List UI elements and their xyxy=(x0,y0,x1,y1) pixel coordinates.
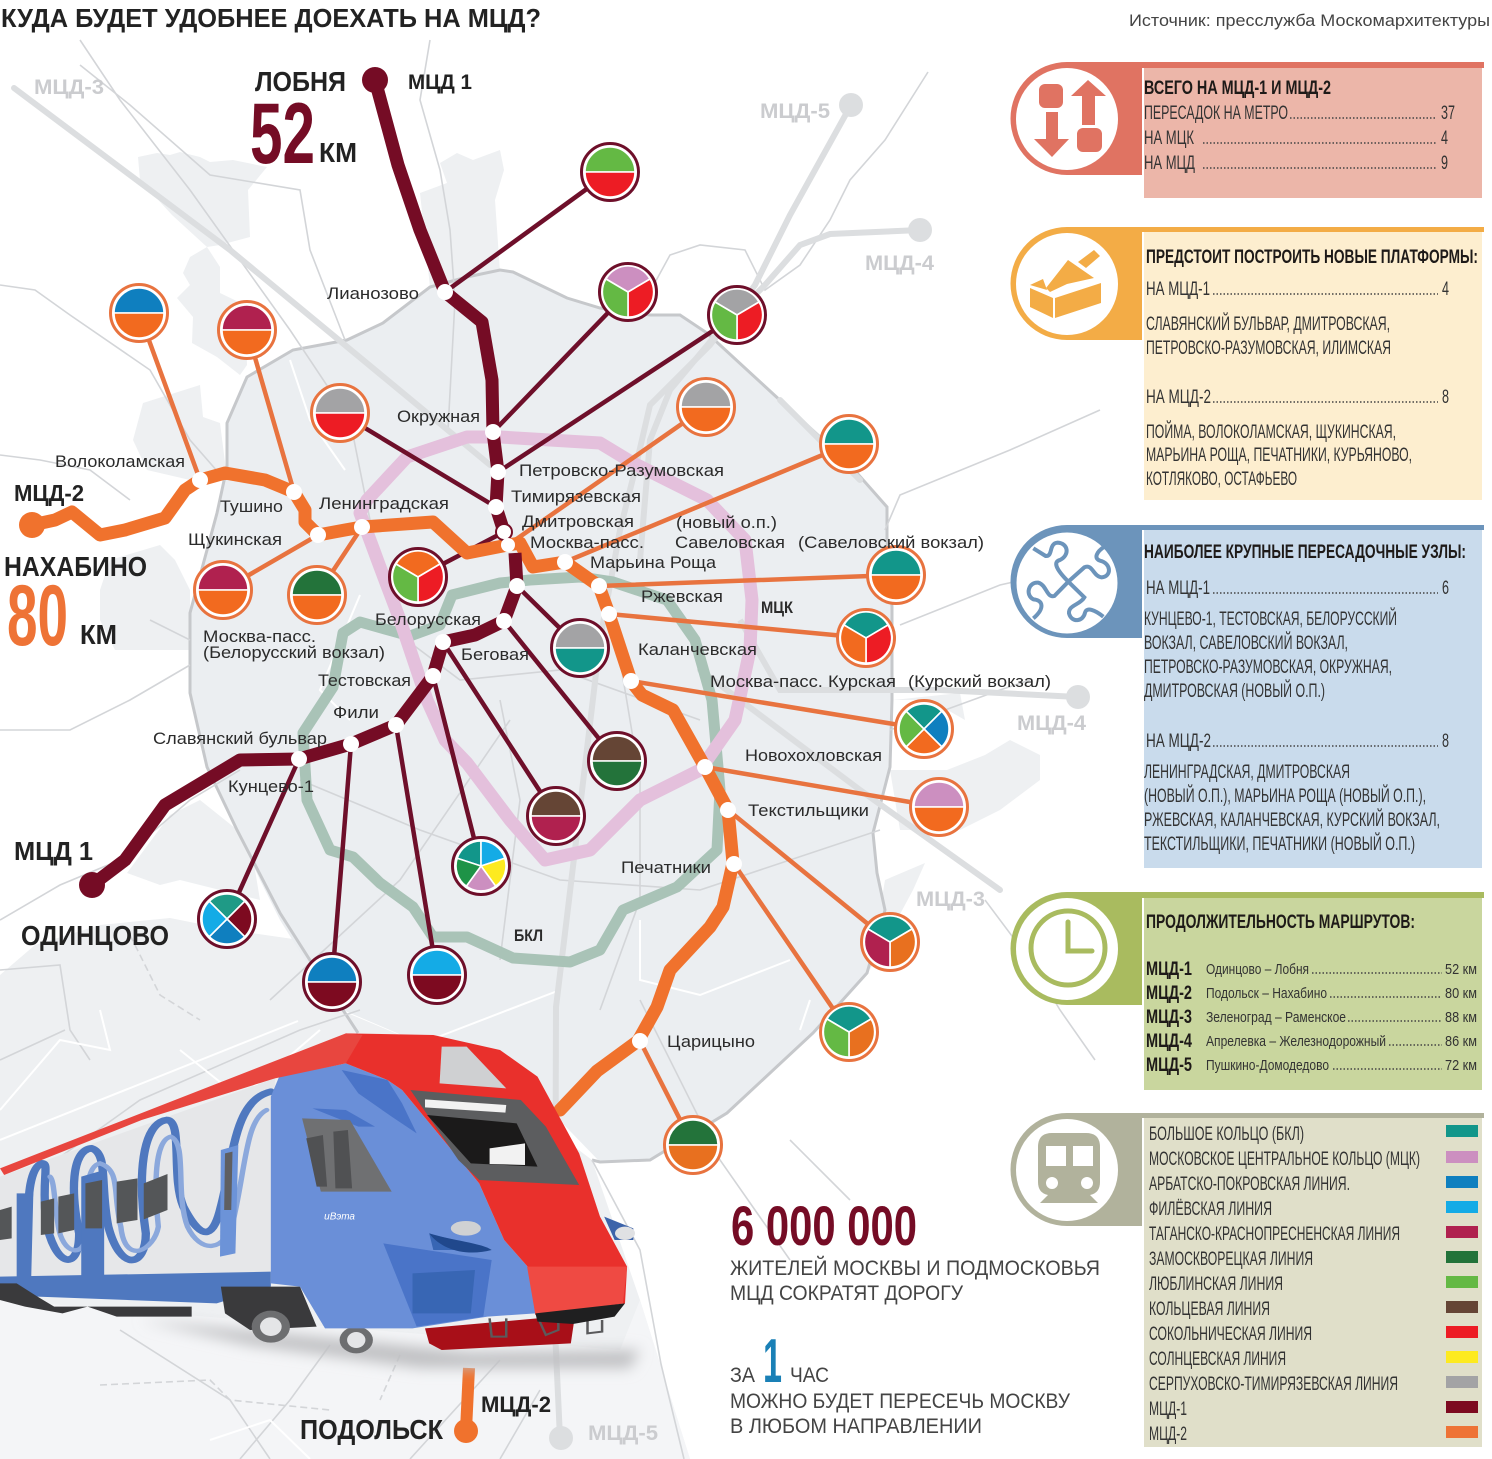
panel: new platforms xyxy=(1011,227,1484,500)
transfer: Fili xyxy=(408,946,466,1004)
callout: 6 million residents: МЦД СОКРАТЯТ ДОРОГУ xyxy=(730,1282,964,1305)
duration rows: МЦД-3 xyxy=(1146,1007,1192,1028)
callout: 6 million residents: 6 000 000 xyxy=(731,1194,917,1257)
station labels: Марьина Роща xyxy=(590,553,717,572)
map background: Moscow and suburbs xyxy=(0,150,1040,1459)
duration rows: 88 км xyxy=(1445,1009,1477,1026)
legend rows: МЦД-1 xyxy=(1149,1399,1187,1420)
transfer: Belorusskaya xyxy=(552,620,608,676)
duration rows: МЦД-2 xyxy=(1146,983,1192,1004)
transfer: Marina Roshcha area xyxy=(678,378,734,436)
platforms text: НА МЦД-1 xyxy=(1146,279,1210,300)
cab blue xyxy=(271,1063,535,1328)
train shadow xyxy=(140,1320,640,1368)
transfers rows: НА МЦД xyxy=(1144,153,1195,174)
transfer: Kuntsevo xyxy=(198,890,256,948)
hubs text: НА МЦД-1 xyxy=(1146,578,1210,599)
hubs text: 6 xyxy=(1442,578,1449,599)
terminus labels and distances: МЦД 1 xyxy=(14,836,93,866)
callout: one hour: В ЛЮБОМ НАПРАВЛЕНИИ xyxy=(730,1415,982,1438)
station labels: (новый о.п.) xyxy=(676,513,777,532)
transfers rows: НА МЦК xyxy=(1144,128,1194,149)
cab side window xyxy=(302,1118,392,1192)
duration rows: МЦД-1 xyxy=(1146,959,1192,980)
transfer: Shchukinskaya xyxy=(194,562,252,618)
callout: 6 million residents: ЖИТЕЛЕЙ МОСКВЫ И ПОДМОСКОВЬЯ xyxy=(730,1256,1100,1280)
icon: transfer arrows xyxy=(1034,80,1106,157)
legend rows: АРБАТСКО-ПОКРОВСКАЯ ЛИНИЯ. xyxy=(1149,1174,1350,1195)
station nodes xyxy=(192,284,742,1049)
callout: one hour: МОЖНО БУДЕТ ПЕРЕСЕЧЬ МОСКВУ xyxy=(730,1390,1071,1413)
station labels: Фили xyxy=(333,703,379,722)
station labels: Ржевская xyxy=(641,587,723,606)
cab red xyxy=(346,1033,627,1315)
duration rows xyxy=(1146,959,1477,1076)
station labels: Щукинская xyxy=(188,530,282,549)
duration rows: Подольск – Нахабино xyxy=(1206,985,1327,1002)
station labels: (Курский вокзал) xyxy=(908,672,1051,691)
grey line labels: МЦД-4 xyxy=(1017,712,1086,735)
station labels: Царицыно xyxy=(667,1032,755,1051)
white district borders xyxy=(0,360,810,1459)
transfer: Timiryazevskaya xyxy=(312,384,368,442)
transfer connectors MCD-2 xyxy=(139,313,939,1145)
terminus labels and distances: НАХАБИНО xyxy=(4,551,147,582)
station labels: Москва-пасс. xyxy=(203,627,316,646)
transfer: Moskva-pass Savelovskaya xyxy=(820,416,878,472)
transfer circles xyxy=(110,144,968,1174)
transfer: Tekstilshchiki xyxy=(862,914,918,970)
station labels: МЦК xyxy=(761,598,794,617)
terminus labels and distances: ПОДОЛЬСК xyxy=(300,1414,444,1445)
transfer: Lianozovo xyxy=(582,144,638,200)
transfer: Testovskaya five lines xyxy=(452,838,510,894)
MCD-2 line xyxy=(19,473,733,1443)
windshield xyxy=(410,1090,579,1185)
terminus labels and distances: КМ xyxy=(80,619,117,650)
transfer: Petrovsko-Razumovskaya xyxy=(708,286,766,344)
station labels: Волоколамская xyxy=(55,452,185,471)
platforms text: 8 xyxy=(1442,387,1449,408)
legend rows: МЦД-2 xyxy=(1149,1424,1187,1445)
terminus labels and distances: МЦД-2 xyxy=(14,480,84,506)
transfers rows: 37 xyxy=(1441,103,1455,124)
station labels: Славянский бульвар xyxy=(153,729,327,748)
terminus labels and distances: МЦД-2 xyxy=(481,1392,551,1417)
duration rows: Одинцово – Лобня xyxy=(1206,961,1309,978)
lower skirt xyxy=(425,1315,575,1350)
duration rows: 52 км xyxy=(1445,961,1477,978)
grey line labels: МЦД-3 xyxy=(34,76,104,99)
station labels: Дмитровская xyxy=(522,512,634,531)
terminus labels and distances: 52 xyxy=(250,86,315,182)
station labels: БКЛ xyxy=(514,926,543,945)
MCD-5 xyxy=(549,93,863,1450)
station labels: Окружная xyxy=(397,407,480,426)
hubs text xyxy=(1144,578,1449,855)
grey line labels: МЦД-5 xyxy=(760,100,830,123)
legend rows xyxy=(1149,1124,1478,1445)
station labels: Лианозово xyxy=(327,284,419,303)
MCD-4 xyxy=(640,218,1090,709)
train side body xyxy=(0,1078,275,1280)
station labels: Тушино xyxy=(220,497,283,516)
platforms text: 4 xyxy=(1442,279,1449,300)
legend rows: КОЛЬЦЕВАЯ ЛИНИЯ xyxy=(1149,1299,1270,1320)
terminus labels and distances: МЦД 1 xyxy=(408,71,472,94)
hubs text: ЛЕНИНГРАДСКАЯ, ДМИТРОВСКАЯ xyxy=(1144,762,1350,783)
transfer: Kalanchevskaya xyxy=(838,610,894,666)
transfers rows: 9 xyxy=(1441,153,1448,174)
panel: largest hubs xyxy=(1011,525,1484,868)
callout: 6 million residents xyxy=(730,1194,1100,1305)
station labels: Новохохловская xyxy=(745,746,882,765)
duration rows: МЦД-5 xyxy=(1146,1055,1192,1076)
roof xyxy=(0,1033,363,1175)
transfers rows: ПЕРЕСАДОК НА МЕТРО xyxy=(1144,103,1288,124)
duration rows: Пушкино-Домодедово xyxy=(1206,1057,1329,1074)
panel: route duration xyxy=(1011,892,1484,1090)
logo: иВэта xyxy=(324,1211,355,1222)
station labels: Ленинградская xyxy=(319,494,449,513)
grey line labels: МЦД-3 xyxy=(916,888,985,911)
transfers rows xyxy=(1144,103,1455,174)
hubs text: ВОКЗАЛ, САВЕЛОВСКИЙ ВОКЗАЛ, xyxy=(1144,632,1348,654)
BKL ring line xyxy=(303,577,720,962)
callout: one hour: ЧАС xyxy=(790,1364,829,1387)
platforms text: НА МЦД-2 xyxy=(1146,387,1211,408)
platforms text xyxy=(1146,279,1449,490)
icon: clock xyxy=(1031,911,1105,985)
terminus labels and distances: 80 xyxy=(7,568,68,664)
transfer: Leningradskaya xyxy=(288,566,346,624)
headlights xyxy=(604,1217,633,1240)
transfers rows: 4 xyxy=(1441,128,1448,149)
source line: Источник: пресслужба Москомархитектуры xyxy=(1129,11,1490,30)
MCD-3 xyxy=(14,88,1000,890)
duration rows: МЦД-4 xyxy=(1146,1031,1192,1052)
train illustration xyxy=(0,1033,635,1353)
transfer: Volokolamskaya xyxy=(110,284,168,342)
train lower stripe xyxy=(0,1272,271,1303)
transfer: Slavyansky bulvar xyxy=(304,954,360,1010)
legend rows: СОЛНЦЕВСКАЯ ЛИНИЯ xyxy=(1149,1349,1286,1370)
side windows xyxy=(0,1174,168,1240)
grey line labels: МЦД-5 xyxy=(588,1422,658,1445)
station labels: Текстильщики xyxy=(748,801,869,820)
legend rows: ЛЮБЛИНСКАЯ ЛИНИЯ xyxy=(1149,1274,1283,1295)
icon: brick and trowel xyxy=(1030,250,1101,318)
grey line labels xyxy=(34,76,1086,1445)
transfer: Tsaritsyno xyxy=(664,1116,722,1174)
station labels: (Савеловский вокзал) xyxy=(798,533,984,552)
undercarriage xyxy=(0,1283,317,1330)
legend rows: ФИЛЁВСКАЯ ЛИНИЯ xyxy=(1149,1199,1272,1220)
livery waves xyxy=(25,1092,271,1260)
transfer connectors MCD-1 xyxy=(227,172,737,982)
title: КУДА БУДЕТ УДОБНЕЕ ДОЕХАТЬ НА МЦД? xyxy=(1,3,541,33)
station labels: Тестовская xyxy=(318,671,411,690)
callout: one hour: 1 xyxy=(763,1327,782,1396)
duration rows: 72 км xyxy=(1445,1057,1477,1074)
station labels: Тимирязевская xyxy=(511,487,641,506)
duration rows: 86 км xyxy=(1445,1033,1477,1050)
transfer: Begovaya xyxy=(528,788,584,844)
station labels: Белорусская xyxy=(375,610,481,629)
transfer: Kurskaya xyxy=(896,700,952,758)
icon: train front xyxy=(1038,1133,1100,1203)
duration rows: Апрелевка – Железнодорожный xyxy=(1206,1033,1386,1050)
terminus labels and distances: ЛОБНЯ xyxy=(255,66,346,97)
station labels: Беговая xyxy=(461,645,529,664)
MCD-1 line xyxy=(79,67,517,898)
transfer: Rzhevskaya xyxy=(868,546,924,604)
transfer: Tushino xyxy=(218,302,276,358)
station labels: Каланчевская xyxy=(638,640,757,659)
platforms text: КОТЛЯКОВО, ОСТАФЬЕВО xyxy=(1146,469,1297,490)
station labels: Кунцево-1 xyxy=(228,777,314,796)
icon: puzzle xyxy=(1029,543,1109,620)
terminus labels and distances: КМ xyxy=(319,137,357,168)
panel: transfers total xyxy=(1011,62,1484,198)
station labels: Москва-пасс. Курская xyxy=(710,672,896,691)
road network thin lines xyxy=(0,40,1100,1459)
hubs text: ДМИТРОВСКАЯ (НОВЫЙ О.П.) xyxy=(1144,680,1325,702)
callout: one hour: ЗА xyxy=(730,1364,755,1387)
station labels: Савеловская xyxy=(675,533,785,552)
duration rows: 80 км xyxy=(1445,985,1477,1002)
panel: legend xyxy=(1011,1113,1484,1447)
station labels xyxy=(55,284,1051,1051)
transfer: Okruzhnaya xyxy=(600,264,656,320)
station labels: Москва-пасс. xyxy=(530,533,644,552)
legend rows: СОКОЛЬНИЧЕСКАЯ ЛИНИЯ xyxy=(1149,1324,1312,1345)
station labels: Петровско-Разумовская xyxy=(519,461,724,480)
station labels: (Белорусский вокзал) xyxy=(203,643,385,662)
grey line labels: МЦД-4 xyxy=(865,252,934,275)
terminus labels and distances: ОДИНЦОВО xyxy=(21,920,169,951)
hubs text: 8 xyxy=(1442,731,1449,752)
legend rows: ЗАМОСКВОРЕЦКАЯ ЛИНИЯ xyxy=(1149,1249,1313,1270)
transfers heading: ВСЕГО НА МЦД-1 И МЦД-2 xyxy=(1144,78,1331,99)
hubs text: НА МЦД-2 xyxy=(1146,731,1211,752)
MCK ring line xyxy=(360,437,752,860)
transfer: Novokhokhlovskaya xyxy=(910,778,968,836)
transfer: Begovaya ring xyxy=(588,732,646,790)
callout: one hour xyxy=(730,1327,1071,1438)
transfer: Pechatniki xyxy=(820,1004,878,1060)
transfer: Dmitrovskaya xyxy=(390,548,446,606)
station labels: Печатники xyxy=(621,858,711,877)
legend rows: БОЛЬШОЕ КОЛЬЦО (БКЛ) xyxy=(1149,1124,1304,1145)
top lamp xyxy=(440,1047,506,1088)
duration rows: Зеленоград – Раменское xyxy=(1206,1009,1346,1026)
terminus labels and distances xyxy=(4,66,551,1445)
